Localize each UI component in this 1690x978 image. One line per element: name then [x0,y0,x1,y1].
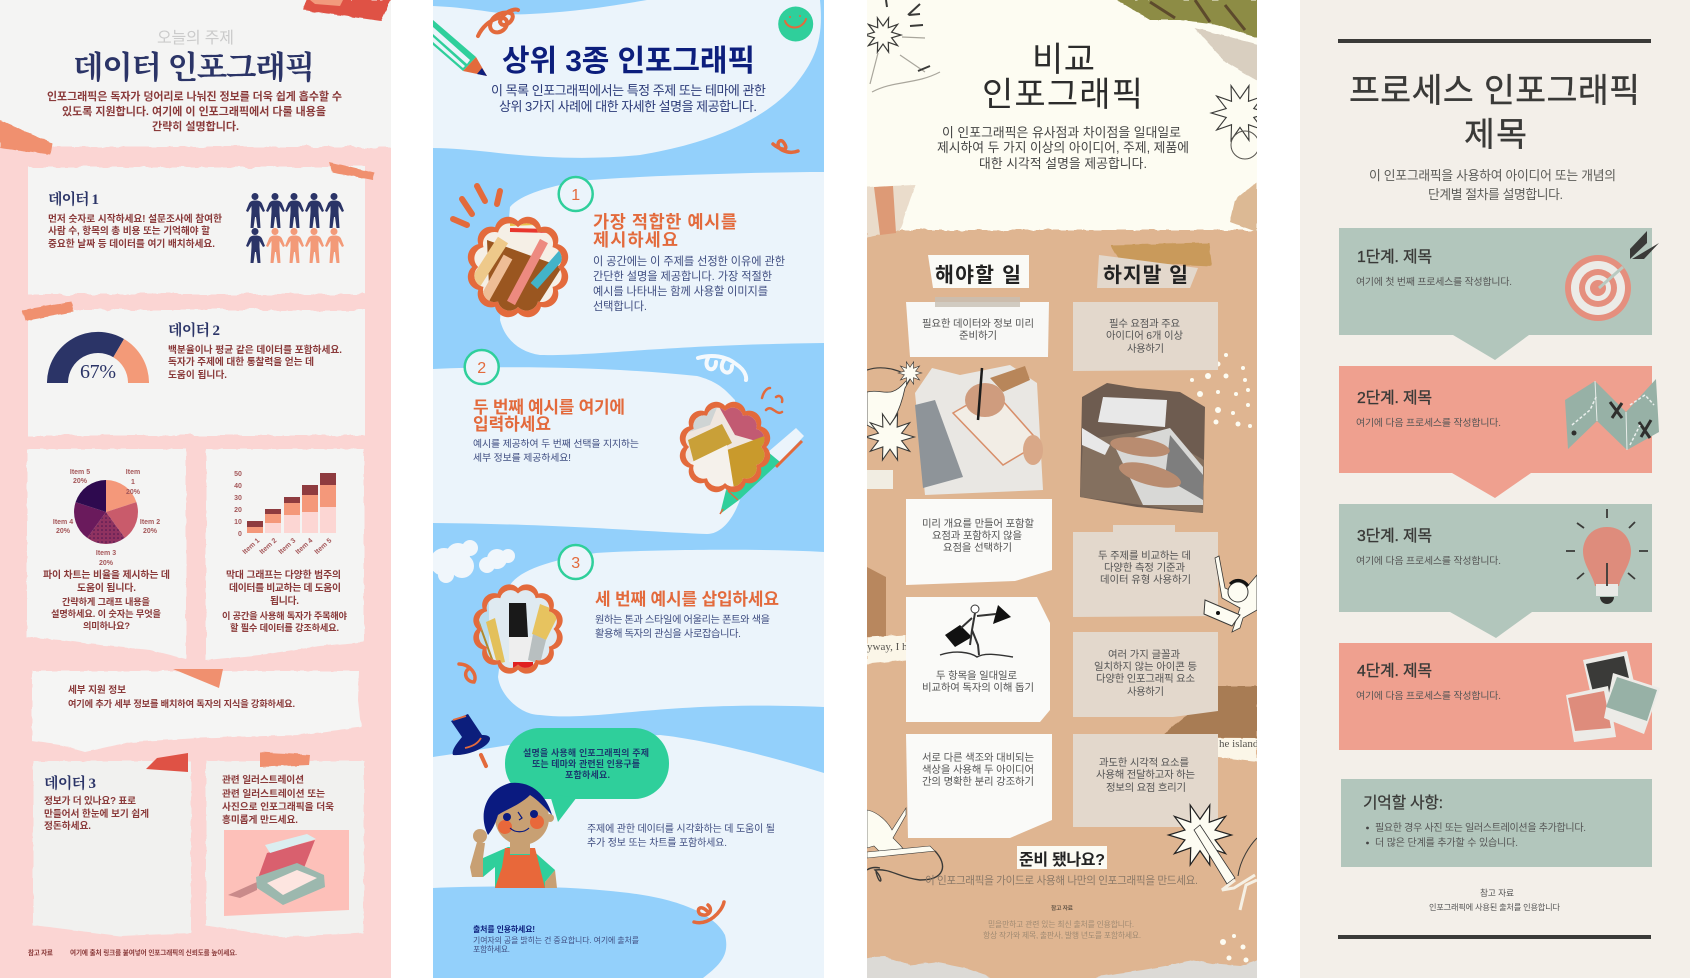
collage: scrap right [1230,182,1257,232]
card: don't 3: 일치하지 않는 아이콘 등 [1094,660,1197,673]
step 4: 여기에 다음 프로세스를 작성합니다. [1356,690,1501,702]
squiggle: near image 3 [459,664,475,682]
text: do 3: 비교하여 독자의 이해 돕기 [922,681,1034,694]
card: don't 1: 필수 요점과 주요 [1109,318,1180,330]
pie chart: 20% [73,478,88,485]
text: do 3: 두 항목을 일대일로 [936,669,1017,682]
card: do 2: 요점을 선택하기 [943,541,1012,554]
tape: top right light patch [310,0,343,6]
wave: footer [433,887,726,978]
heading: example 1: 제시하세요 [593,230,678,250]
body: data note: 추가 정보 또는 차트를 포함하세요. [587,836,727,849]
body: data 2: 독자가 주제에 대한 통찰력을 얻는 데 [168,355,314,368]
subtitle [1369,168,1616,202]
tape on supporting card [173,669,223,688]
card: bar chart [206,449,364,660]
body: data 3 [44,794,149,832]
pie chart: 20% [143,528,158,535]
body: example 3: 원하는 톤과 스타일에 어울리는 폰트와 색을 [595,613,770,626]
photo: typing on laptop [1080,383,1205,513]
card: do 4: 간의 명확한 분리 강조하기 [922,775,1034,788]
illustration: child [470,783,557,888]
body: data 1: 사람 수, 항목의 총 비용 또는 기억해야 할 [48,224,210,237]
step 1 [1339,228,1659,360]
rays around image 1 [453,186,500,225]
body: data note [587,822,775,849]
pie chart: Item [126,469,140,476]
title: 데이터 인포그래픽 [73,50,315,85]
references: 항상 작가와 제목, 출판사, 발행 년도를 포함하세요. [983,930,1141,940]
subtitle: 상위 3가지 사례에 대한 자세한 설명을 제공합니다. [499,99,757,114]
wave: section 3 [498,550,824,716]
intro text: 간략히 설명합니다. [152,119,239,133]
subtitle [937,125,1189,171]
stacked bar chart [234,471,336,556]
squiggle: right [773,141,798,152]
title [1349,73,1640,154]
body: data 2 [168,343,342,381]
label: ready: 준비 됐나요? [1019,851,1105,869]
heading: data 1: 데이터 1 [48,190,99,208]
body: example 1: 이 공간에는 이 주제를 선정한 이유에 관한 [593,255,785,268]
tape on card 1 [329,162,375,180]
card: illustration [206,752,364,937]
intro text [47,89,342,133]
text: pie chart: 간략하게 그래프 내용을 [62,596,151,607]
stacked bar chart: 20 [234,507,242,514]
stacked bar chart: 50 [234,471,242,478]
wave: section 1 [500,172,824,355]
clouds [430,540,515,583]
card: supporting detail [32,669,361,752]
eyebrow: 오늘의 주제 [157,29,234,47]
torn paper: bottom right [1075,958,1265,978]
panel: process infographic [1300,0,1690,978]
text: illustration card: 사진으로 인포그래픽을 더욱 [222,800,334,813]
number badge 1: 1 [571,187,580,204]
heading: example 2: 입력하세요 [473,415,551,434]
panel: comparison infographic [857,0,1269,978]
references: 인포그래픽에 사용된 출처를 인용합니다 [1429,902,1560,912]
panel: data infographic [0,0,401,978]
pie chart: Item 4 [53,519,73,526]
title: 제목 [1464,117,1527,154]
pie chart: Item 3 [96,550,116,557]
title: 프로세스 인포그래픽 [1349,73,1640,110]
tape on card 2 [22,302,73,321]
pie chart [53,469,160,567]
footer: references [28,949,236,956]
footer: citation: 포함하세요. [473,944,510,954]
body: data 3: 만들어서 한눈에 보기 쉽게 [44,807,149,820]
squiggle: top [478,10,518,36]
tape on card 3 [146,753,188,772]
speech bubble: 설명을 사용해 인포그래픽의 주제 [523,747,649,758]
number badge 1 [559,177,593,211]
card: don't 3 [1073,632,1218,717]
body: data 1 [48,212,222,250]
card: don't 4 [1073,734,1218,827]
subtitle: 이 인포그래픽은 유사점과 차이점을 일대일로 [942,125,1181,140]
text: illustration card [222,773,334,826]
stacked bar chart: Item 4 [295,537,314,556]
intro text: 있도록 지원합니다. 여기에 이 인포그래픽에서 다룰 내용을 [62,104,326,118]
doodle: man with laptop [1204,556,1257,632]
text: bar chart: 할 필수 데이터를 강조하세요. [230,622,339,633]
step 4 [1339,643,1660,750]
figure: balancing items [940,605,1013,657]
header paper [0,0,401,147]
icon: pen [720,428,804,514]
card: don't 4: 과도한 시각적 요소를 [1099,757,1189,769]
body: example 3 [595,613,770,640]
doodle: pencil burst [1168,805,1257,910]
label: do: 해야할 일 [935,264,1021,287]
card: don't 1: 사용하기 [1127,342,1164,355]
doodle: star figure [866,362,922,489]
pie chart: Item 5 [70,469,90,476]
stacked bar chart: 10 [234,519,242,526]
speech bubble: 또는 테마와 관련된 인용구를 [532,758,640,769]
wave: section 2 [433,367,745,534]
text: illustration card: 관련 일러스트레이션 [222,773,304,786]
body: example 1: 예시를 나타내는 함께 사용할 이미지를 [593,285,768,298]
step 3: 3단계. 제목 [1357,527,1432,545]
doodle: scrap background right: he island [1219,738,1259,750]
heading: example 1 [593,212,737,250]
stacked bar chart: 0 [238,531,242,538]
doodle: sun right [1211,86,1269,159]
text: illustration card: 관련 일러스트레이션 또는 [222,787,325,800]
icon: pencil [433,20,487,76]
card: don't 2: 데이터 유형 사용하기 [1100,573,1191,586]
body: data 3: 정돈하세요. [44,819,91,832]
card: don't 4: 사용해 전달하고자 하는 [1096,768,1195,781]
number badge 2 [465,350,499,384]
tape on illustration card [260,752,310,767]
step 2: 2단계. 제목 [1357,389,1432,407]
text: do 3 [922,669,1034,694]
header paper [857,0,1267,230]
stacked bar chart: 30 [234,495,242,502]
photo: writing in notebook [915,365,1043,495]
card: don't 2 [1073,525,1218,617]
card: do 4: 서로 다른 색조와 대비되는 [922,752,1034,764]
step 3 [1339,504,1652,638]
body: data note: 주제에 관한 데이터를 시각화하는 데 도움이 될 [587,822,775,835]
pie chart: 20% [99,560,114,567]
photo: open box [224,830,349,916]
icon: smiley [778,6,813,42]
text: pie chart: 파이 차트는 비율을 제시하는 데 [43,568,170,581]
collage: grey paper [1195,28,1260,82]
panel: top three infographic [430,0,824,978]
footer: references: 여기에 출처 링크를 붙여넣어 인포그래픽의 신뢰도를 높이세요. [70,948,237,957]
body: supporting detail: 여기에 추가 세부 정보를 배치하여 독자의 지식을 강화하세요. [68,698,295,709]
title: 상위 3종 인포그래픽 [502,45,755,78]
step 2: 여기에 다음 프로세스를 작성합니다. [1356,417,1501,429]
subtitle: 제시하여 두 가지 이상의 아이디어, 주제, 제품에 [937,140,1189,155]
body: example 2 [473,437,639,464]
top rule [1338,39,1651,43]
text: bar chart [222,568,348,633]
label: don't [1097,255,1198,288]
body: data 3: 정보가 더 있나요? 표로 [44,794,136,807]
card: do 1: 필요한 데이터와 정보 미리 [922,318,1034,330]
card: data 3 [33,753,191,936]
card: do 2 [906,499,1052,585]
text: pie chart [43,568,170,631]
card: don't 1 [1073,302,1218,371]
wave: section 4 [433,735,824,978]
card: data 2 [18,302,375,435]
image 2: painting [675,400,775,500]
step 1: 1단계. 제목 [1357,248,1432,266]
footer: citation [473,924,639,954]
pie chart: 1 [131,479,135,486]
subtitle [491,83,766,114]
icon: target [1565,231,1659,321]
references: 믿을만하고 관련 있는 최신 출처를 인용합니다. [988,919,1134,929]
text: bar chart: 데이터를 비교하는 데 도움이 [229,581,341,594]
speech bubble [505,728,669,822]
heading: data 2: 데이터 2 [168,321,220,339]
title: 인포그래픽 [982,76,1143,114]
step 2 [1339,366,1659,498]
collage: tape scrap left [867,185,915,237]
stacked bar chart: Item 1 [242,537,261,556]
speech bubble: 포함하세요. [565,769,610,780]
doodle: scrap background left [867,567,908,664]
card: don't 4: 정보의 요점 흐리기 [1106,782,1186,794]
image 1: art tools [465,215,571,321]
squiggle: bottom [694,902,724,923]
step 3: 여기에 다음 프로세스를 작성합니다. [1356,555,1501,567]
card: do 1: 준비하기 [959,329,997,342]
heading: example 2 [473,398,625,434]
memo box [1341,779,1652,867]
card: do 3 [906,597,1050,722]
icon: map [1565,379,1659,450]
doodle: scrap background right [1160,686,1259,762]
doodle: sun runner [865,0,940,92]
title [982,41,1143,114]
text: pie chart: 도움이 됩니다. [77,581,136,594]
text: pie chart: 설명하세요. 이 숫자는 무엇을 [51,608,162,619]
heading: example 1: 가장 적합한 예시를 [593,212,737,232]
icon: light bulb [1566,509,1648,604]
tape: over don't heading [1110,243,1212,266]
card: don't 3: 여러 가지 글꼴과 [1108,649,1180,661]
text: pie chart: 의미하나요? [83,620,130,631]
body: example 1: 간단한 설명을 제공합니다. 가장 적절한 [593,269,772,283]
bottom rule [1338,935,1651,939]
body: example 1: 선택합니다. [593,300,647,313]
heading: example 2: 두 번째 예시를 여기에 [473,398,625,417]
number badge 3: 3 [571,555,580,572]
pie chart: 20% [126,489,141,496]
body: example 2: 예시를 제공하여 두 번째 선택을 지지하는 [473,437,639,450]
step 1: 여기에 첫 번째 프로세스를 작성합니다. [1356,276,1512,288]
stacked bar chart: 40 [234,483,242,490]
subtitle: 이 목록 인포그래픽에서는 특정 주제 또는 테마에 관한 [491,83,766,98]
references [1429,888,1560,912]
subtitle: 이 인포그래픽을 사용하여 아이디어 또는 개념의 [1369,168,1616,183]
text: bar chart: 이 공간을 사용해 독자가 주목해야 [222,610,348,621]
stacked bar chart: Item 5 [314,537,333,556]
subtitle: 단계별 절차를 설명합니다. [1428,187,1563,202]
gauge: 67 percent [47,332,149,383]
card: don't 3: 다양한 인포그래픽 요소 [1096,673,1195,685]
body: example 2: 세부 정보를 제공하세요! [473,451,571,464]
heading: supporting detail: 세부 지원 정보 [68,683,126,696]
dots: bottom right [1220,934,1248,962]
memo box: 더 많은 단계를 추가할 수 있습니다. [1375,837,1518,849]
card: don't 2: 다양한 측정 기준과 [1104,562,1185,574]
dots: white [1190,353,1252,428]
number badge 3 [559,545,593,579]
icon: photos [1566,651,1660,742]
references: 참고 자료 [1480,888,1514,898]
squiggle: small orange [762,388,782,413]
title: 비교 [1032,41,1095,79]
body: data 2: 도움이 됩니다. [168,368,227,381]
body: data 2: 백분율이나 평균 같은 데이터를 포함하세요. [168,343,342,356]
squiggle: white [698,356,746,380]
heading: example 3: 세 번째 예시를 삽입하세요 [595,590,779,609]
image 3: brushes [470,584,570,675]
footer: citation: 기여자의 공을 밝히는 건 중요합니다. 여기에 출처를 [473,935,639,945]
gauge: 67 percent: 67% [80,361,116,383]
card: don't 2: 두 주제를 비교하는 데 [1098,549,1191,562]
body: example 3: 활용해 독자의 관심을 사로잡습니다. [595,627,741,640]
memo box: 기억할 사항: [1363,794,1443,812]
cta text: 이 인포그래픽을 가이드로 사용해 나만의 인포그래픽을 만드세요. [925,874,1198,887]
card: don't 3: 사용하기 [1127,685,1164,698]
card: do 1 [906,297,1049,357]
number badge 2: 2 [477,360,486,377]
card: do 4 [906,734,1052,838]
body: example 1 [593,255,785,313]
icon: push pin [451,714,490,766]
icon: ten people pictogram [246,193,344,263]
torn paper: bottom left [860,957,1000,978]
footer: citation: 출처를 인용하세요! [473,924,535,934]
tape: left [0,120,52,155]
stacked bar chart: Item 3 [278,537,297,556]
doodle: scrap background left: yway, I h [867,641,908,653]
card: do 4: 색상을 사용해 두 아이디어 [922,763,1034,776]
heading: data 3: 데이터 3 [44,774,96,792]
doodle: surfer on pencil [867,808,943,881]
card: data 1 [18,162,375,294]
text: illustration card: 흥미롭게 만드세요. [222,813,298,826]
intro text: 인포그래픽은 독자가 덩어리로 나눠진 정보를 더욱 쉽게 흡수할 수 [47,89,342,103]
card: pie chart [27,449,186,659]
footer: references: 참고 자료 [28,948,53,957]
label: do [928,255,1029,288]
memo box: 필요한 경우 사진 또는 일러스트레이션을 추가합니다. [1375,821,1586,834]
stacked bar chart: Item 2 [259,537,278,556]
tape: top right [303,0,391,21]
subtitle: 대한 시각적 설명을 제공합니다. [979,156,1147,171]
label: don't: 하지말 일 [1103,264,1188,287]
references: 참고 자료 [1051,904,1074,912]
card: do 2: 요점과 포함하지 않을 [932,529,1022,542]
body: data 1: 중요한 날짜 등 데이터를 여기 배치하세요. [48,237,215,250]
text: bar chart: 됩니다. [270,594,299,607]
body: data 1: 먼저 숫자로 시작하세요! 설문조사에 참여한 [48,212,222,225]
step 4: 4단계. 제목 [1357,662,1432,680]
card: do 2: 미리 개요를 만들어 포함할 [922,518,1034,530]
card: don't 1: 아이디어 6개 이상 [1106,330,1183,342]
references [983,904,1141,940]
text: bar chart: 막대 그래프는 다양한 범주의 [226,568,341,581]
pie chart: Item 2 [140,519,160,526]
wave: header [433,0,821,158]
pie chart: 20% [56,528,71,535]
collage: mountain scrap [1117,0,1260,38]
